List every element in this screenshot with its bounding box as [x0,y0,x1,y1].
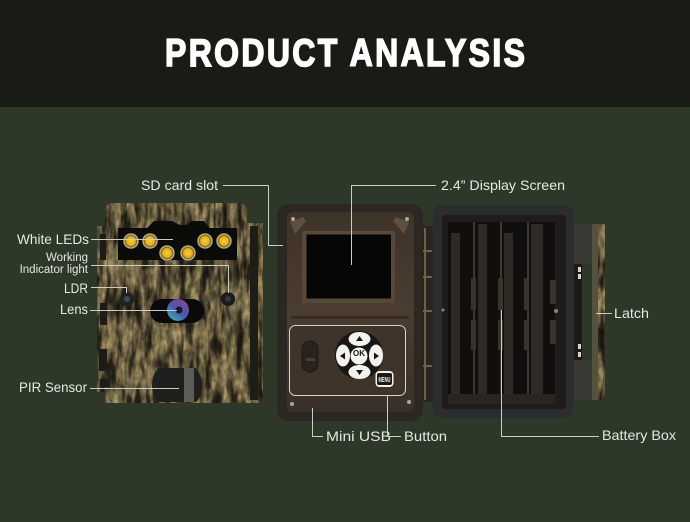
callout: working indicator light: Indicator light [20,264,89,276]
power switch [302,341,318,372]
camera front with bark camouflage [97,198,263,406]
callout: working indicator light [20,252,228,293]
camera back with screen and buttons [277,204,423,421]
latch [574,224,605,400]
inner shell [287,212,414,412]
callout: display screen: 2.4” Display Screen [441,177,565,193]
callout: SD card slot: SD card slot [141,177,218,193]
callout: battery box: Battery Box [602,427,676,443]
door outer [433,205,574,418]
working indicator light [221,292,235,306]
menu button: MENU [378,377,390,384]
callout: LDR: LDR [64,280,88,296]
callout: lens [60,301,177,317]
callout: display screen [352,177,565,265]
camouflage latch strip [592,224,605,400]
right side strip [246,223,263,403]
left side strip [97,226,107,392]
callout: working indicator light: Working [46,252,88,264]
hinges [422,226,433,402]
lower body tint [291,316,409,319]
callout: PIR sensor: PIR Sensor [19,379,87,395]
lens [150,299,204,323]
white LEDs [123,233,232,261]
callout: Mini USB [312,408,391,444]
menu button [376,371,394,387]
callout: Mini USB: Mini USB [326,428,391,444]
outer shell [277,204,423,421]
door screws [442,308,558,313]
display frame [302,231,395,303]
LDR [120,292,134,306]
left side slots [99,234,107,387]
callout: white LEDs: White LEDs [17,231,89,247]
top bevels [290,217,409,234]
callout: SD card slot [141,177,283,246]
callout: lens: Lens [60,301,88,317]
callout: LDR [64,280,126,296]
direction pad [335,331,383,379]
camouflage body [105,203,247,403]
callout: button [388,396,447,444]
LED panel [118,221,237,260]
callout: button: Button [404,428,447,444]
display screen [306,234,391,298]
button panel outline [290,326,406,396]
callout: latch [596,305,649,321]
battery door [433,205,574,418]
corner screws [290,217,411,406]
callout: latch: Latch [614,305,649,321]
direction pad: OK [353,349,365,358]
battery box compartments [448,222,556,404]
PIR sensor [152,368,202,402]
title: PRODUCT ANALYSIS [165,31,525,75]
callout: battery box [502,310,676,443]
header band [0,0,690,107]
door inner [442,215,566,409]
